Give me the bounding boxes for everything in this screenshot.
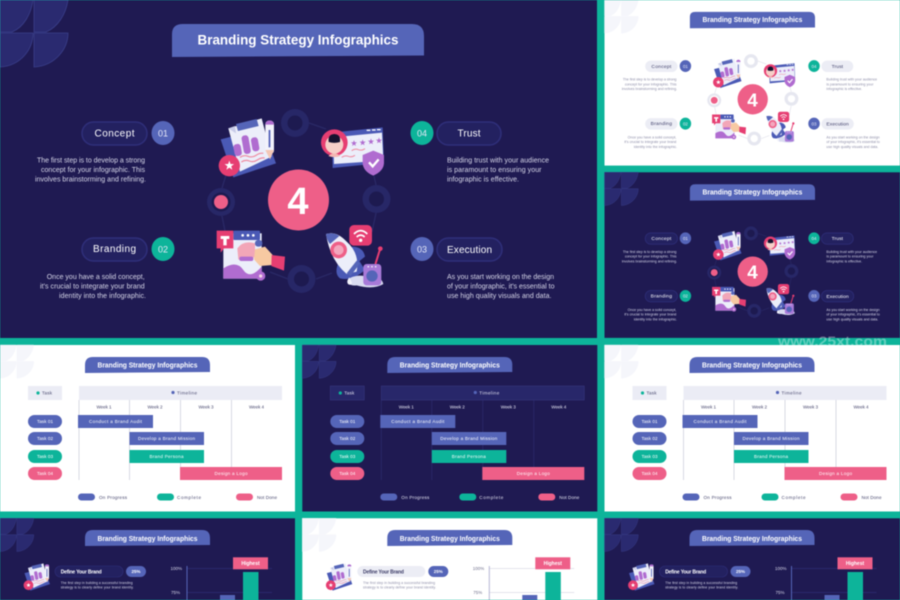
block: execution: Execution [447,245,492,256]
task pills: Task 04 [37,471,53,476]
block: branding: identity into the infographic. [59,293,146,300]
bar chart: 100% [775,566,786,571]
task pills [28,415,62,480]
define your brand block: 25% [434,569,443,574]
gantt header [330,386,584,400]
bar chart: 100% [170,566,182,571]
corner petals [604,345,638,378]
block: branding: 02 [158,244,168,254]
block: trust: Trust [458,128,481,140]
corner petals [604,172,638,206]
gantt grid [79,400,264,480]
block: trust [410,121,549,184]
legend: Complete [782,495,806,500]
task pills: Task 02 [37,436,53,441]
task pills: Task 01 [37,419,53,424]
block: branding: identity into the infographic. [634,145,677,149]
task pills: Task 03 [339,454,356,459]
block: trust: 04 [417,128,427,138]
define your brand block: The first step in building a successful branding [61,581,133,585]
gantt bars: Conduct a Brand Audit [694,419,747,424]
gantt header: Task [646,391,657,396]
gantt grid: Week 2 [450,404,465,410]
block: trust: Trust [832,236,844,242]
task pills [330,415,364,480]
gantt grid: Week 4 [249,404,264,410]
block: execution: Execution [826,122,849,128]
title banner: Branding Strategy Infographics [702,536,802,543]
block: concept: The first step is to develop a strong [623,250,677,254]
legend [78,494,277,500]
panel: gantt dark middle [302,345,597,512]
gantt bars: Develop a Brand Mission [742,436,800,441]
title banner [85,530,210,546]
block: concept [35,121,174,184]
task pills: Task 02 [339,436,356,441]
title banner: Branding Strategy Infographics [400,362,500,369]
panel: gantt light left [0,345,295,512]
ring diagram [707,54,798,145]
gantt grid: Week 2 [148,404,163,410]
title banner [387,357,512,373]
gantt grid: Week 2 [752,404,767,410]
corner petals decoration [0,0,68,67]
legend: Complete [479,495,504,500]
icon: document [326,563,352,591]
block: trust: is paramount to ensuring your [826,82,874,86]
bar chart: Highest [846,561,864,567]
gantt bars: Design a Logo [517,471,550,476]
define your brand block: 25% [131,569,141,574]
icon: document [628,563,654,591]
bar chart: Highest [544,561,562,567]
block: trust: infographic is effective. [826,259,862,263]
block: execution: of your infographic, it's essential to [447,284,555,290]
ring diagram [707,226,798,318]
gantt bars: Brand Persona [150,454,184,459]
block: concept: involves brainstorming and refining. [622,259,677,263]
block: execution: Execution [826,294,849,300]
block: concept: concept for your infographic. This [625,82,677,86]
task pills: Task 01 [339,419,356,424]
task pills: Task 04 [642,471,658,476]
centre number badge [268,170,329,230]
gantt header [632,386,886,400]
gantt grid [684,400,869,480]
legend [682,494,882,500]
task pills: Task 03 [37,454,53,459]
block: concept: concept for your infographic. This [625,255,677,259]
gantt grid [381,400,567,480]
block: execution: of your infographic, it's essential to [826,313,880,317]
gantt bars: Develop a Brand Mission [138,436,195,441]
block: branding [40,237,174,300]
gantt grid: Week 4 [551,404,567,410]
gantt grid: Week 1 [701,404,716,410]
bar chart [170,557,272,600]
block: branding: it's crucial to integrate your brand [624,140,676,144]
title banner: Branding Strategy Infographics [703,189,802,196]
gantt header: Timeline [782,390,802,395]
define your brand block: 25% [736,569,745,574]
icon: document with star badge [219,118,276,177]
block: concept: 01 [683,64,688,69]
corner petals [302,518,336,552]
task pills: Task 01 [642,419,658,424]
block: trust: Building trust with your audience [826,78,877,82]
title banner [690,357,814,373]
title banner [387,530,512,546]
legend: On Progress [704,495,732,500]
block: branding [624,118,691,149]
bar chart: 100% [473,566,484,571]
title banner: Branding Strategy Infographics [198,32,399,48]
title banner: Branding Strategy Infographics [400,536,500,543]
define your brand block: strategy is to clearly define your brand identity. [61,586,134,590]
bar chart: Highest [241,561,260,567]
bar chart: 75% [775,590,784,595]
gantt bars: Brand Persona [754,454,788,459]
gantt bars [682,415,886,480]
block: concept: 01 [158,128,168,138]
gantt grid: Week 3 [803,404,818,410]
gantt header: Task [42,391,53,396]
block: concept: Concept [94,128,135,140]
define your brand block: Define Your Brand [665,569,706,575]
block: execution [808,118,880,149]
gantt bars: Design a Logo [819,471,852,476]
title banner: Branding Strategy Infographics [98,362,198,369]
corner petals [604,518,638,552]
title banner [690,530,814,546]
panel: right dark slide [604,172,900,338]
block: branding: Once you have a solid concept, [628,136,676,140]
gantt bars: Conduct a Brand Audit [391,419,445,424]
corner petals [0,518,34,552]
block: concept: involves brainstorming and refining. [622,87,677,91]
left node pink dot [214,195,228,209]
panel: gantt light right [604,345,900,512]
bar chart [473,557,574,600]
corner petals [0,345,34,378]
gantt bars [380,415,584,480]
block: trust: is paramount to ensuring your [447,167,542,174]
block: concept [622,60,691,91]
gantt header: Timeline [479,390,500,395]
task pills [632,415,666,480]
block: branding: identity into the infographic. [634,317,677,321]
block: branding: it's crucial to integrate your brand [40,284,145,290]
bar chart: 75% [473,590,482,595]
gantt bars: Develop a Brand Mission [440,436,498,441]
block: execution: 03 [812,294,817,299]
corner petals [604,0,638,33]
define your brand block [357,566,448,590]
icon: hand holding design board [217,231,285,281]
block: trust: Trust [832,64,844,70]
gantt header: Timeline [177,390,197,395]
block: branding: Branding [651,293,672,299]
title banner: Branding Strategy Infographics [703,17,802,24]
define your brand block: The first step in building a successful branding [363,581,435,585]
panel: main dark slide [0,0,597,338]
block: execution: of your infographic, it's essential to [826,140,880,144]
legend [380,494,580,500]
block: branding: it's crucial to integrate your brand [624,313,676,317]
centre number badge: 4 [287,181,309,223]
title banner [690,12,815,28]
define your brand block: Define Your Brand [363,569,404,575]
legend: Not Done [257,495,277,500]
legend: Complete [177,495,201,500]
define your brand block: Define Your Brand [61,569,102,575]
gantt bars: Design a Logo [214,471,248,476]
ring of connector nodes [207,109,390,293]
legend: Not Done [862,495,882,500]
define your brand block: The first step in building a successful branding [665,581,737,585]
gantt grid: Week 1 [399,404,414,410]
block: trust: Building trust with your audience [447,158,549,164]
block: execution: As you start working on the design [826,136,880,140]
block: trust: 04 [812,64,817,69]
block: trust: Building trust with your audience [826,250,877,254]
block: execution [808,290,880,321]
block: trust: is paramount to ensuring your [826,255,874,259]
block: execution: use high quality visuals and data. [826,317,878,321]
legend: On Progress [99,495,128,500]
gantt bars: Brand Persona [452,454,486,459]
block: trust [808,232,877,263]
gantt grid: Week 1 [96,404,112,410]
block: concept: concept for your infographic. This [41,167,146,174]
icon: profile review window with shield [321,127,384,176]
block: branding: Branding [93,244,136,255]
block: branding: Once you have a solid concept, [628,308,676,312]
title banner [172,24,424,57]
block: concept: Concept [651,236,672,242]
block: execution: As you start working on the design [447,274,554,281]
define your brand block: strategy is to clearly define your brand identity. [363,586,436,590]
block: branding: Branding [651,121,672,127]
define your brand block: strategy is to clearly define your brand identity. [665,586,738,590]
block: concept: Concept [651,64,672,70]
block: execution [410,237,555,300]
block: trust: infographic is effective. [826,87,862,91]
block: execution: 03 [812,121,817,126]
icon: rocket with wifi and device [326,225,383,287]
gantt header [28,386,282,400]
block: branding: 02 [683,294,688,299]
panel: bottom dark right [604,518,900,600]
block: concept: The first step is to develop a strong [37,158,145,164]
block: execution: As you start working on the design [826,308,880,312]
panel: bottom dark left [0,518,295,600]
gantt grid: Week 3 [501,404,516,410]
icon: document [24,563,50,591]
bar chart: 75% [171,590,180,595]
panel: top right light slide [604,0,900,166]
corner petals [302,345,336,378]
block: concept [622,232,691,263]
panel: bottom light middle [302,518,597,600]
legend: On Progress [401,495,430,500]
gantt header: Task [344,391,355,396]
title banner [690,184,815,201]
block: branding [624,290,691,321]
bar chart [775,557,876,600]
legend: Not Done [559,495,580,500]
define your brand block [660,566,750,590]
gantt bars: Conduct a Brand Audit [89,419,143,424]
watermark: www.25xt.com [777,333,887,349]
gantt bars [78,415,282,480]
task pills: Task 04 [339,471,356,476]
title banner: Branding Strategy Infographics [702,362,802,369]
block: execution: 03 [417,244,427,254]
block: execution: use high quality visuals and data. [447,293,552,300]
block: branding: Once you have a solid concept, [47,274,145,281]
task pills: Task 03 [642,454,658,459]
define your brand block [55,566,146,590]
task pills: Task 02 [642,436,658,441]
block: execution: use high quality visuals and data. [826,145,878,149]
block: branding: 02 [683,121,688,126]
title banner [85,357,210,373]
block: concept: The first step is to develop a strong [623,78,677,82]
block: concept: 01 [683,236,688,241]
title banner: Branding Strategy Infographics [98,536,198,543]
gantt grid: Week 4 [854,404,869,410]
block: trust [808,60,877,91]
block: concept: involves brainstorming and refining. [35,176,146,184]
block: trust: infographic is effective. [447,176,519,184]
gantt grid: Week 3 [198,404,214,410]
block: trust: 04 [812,236,817,241]
